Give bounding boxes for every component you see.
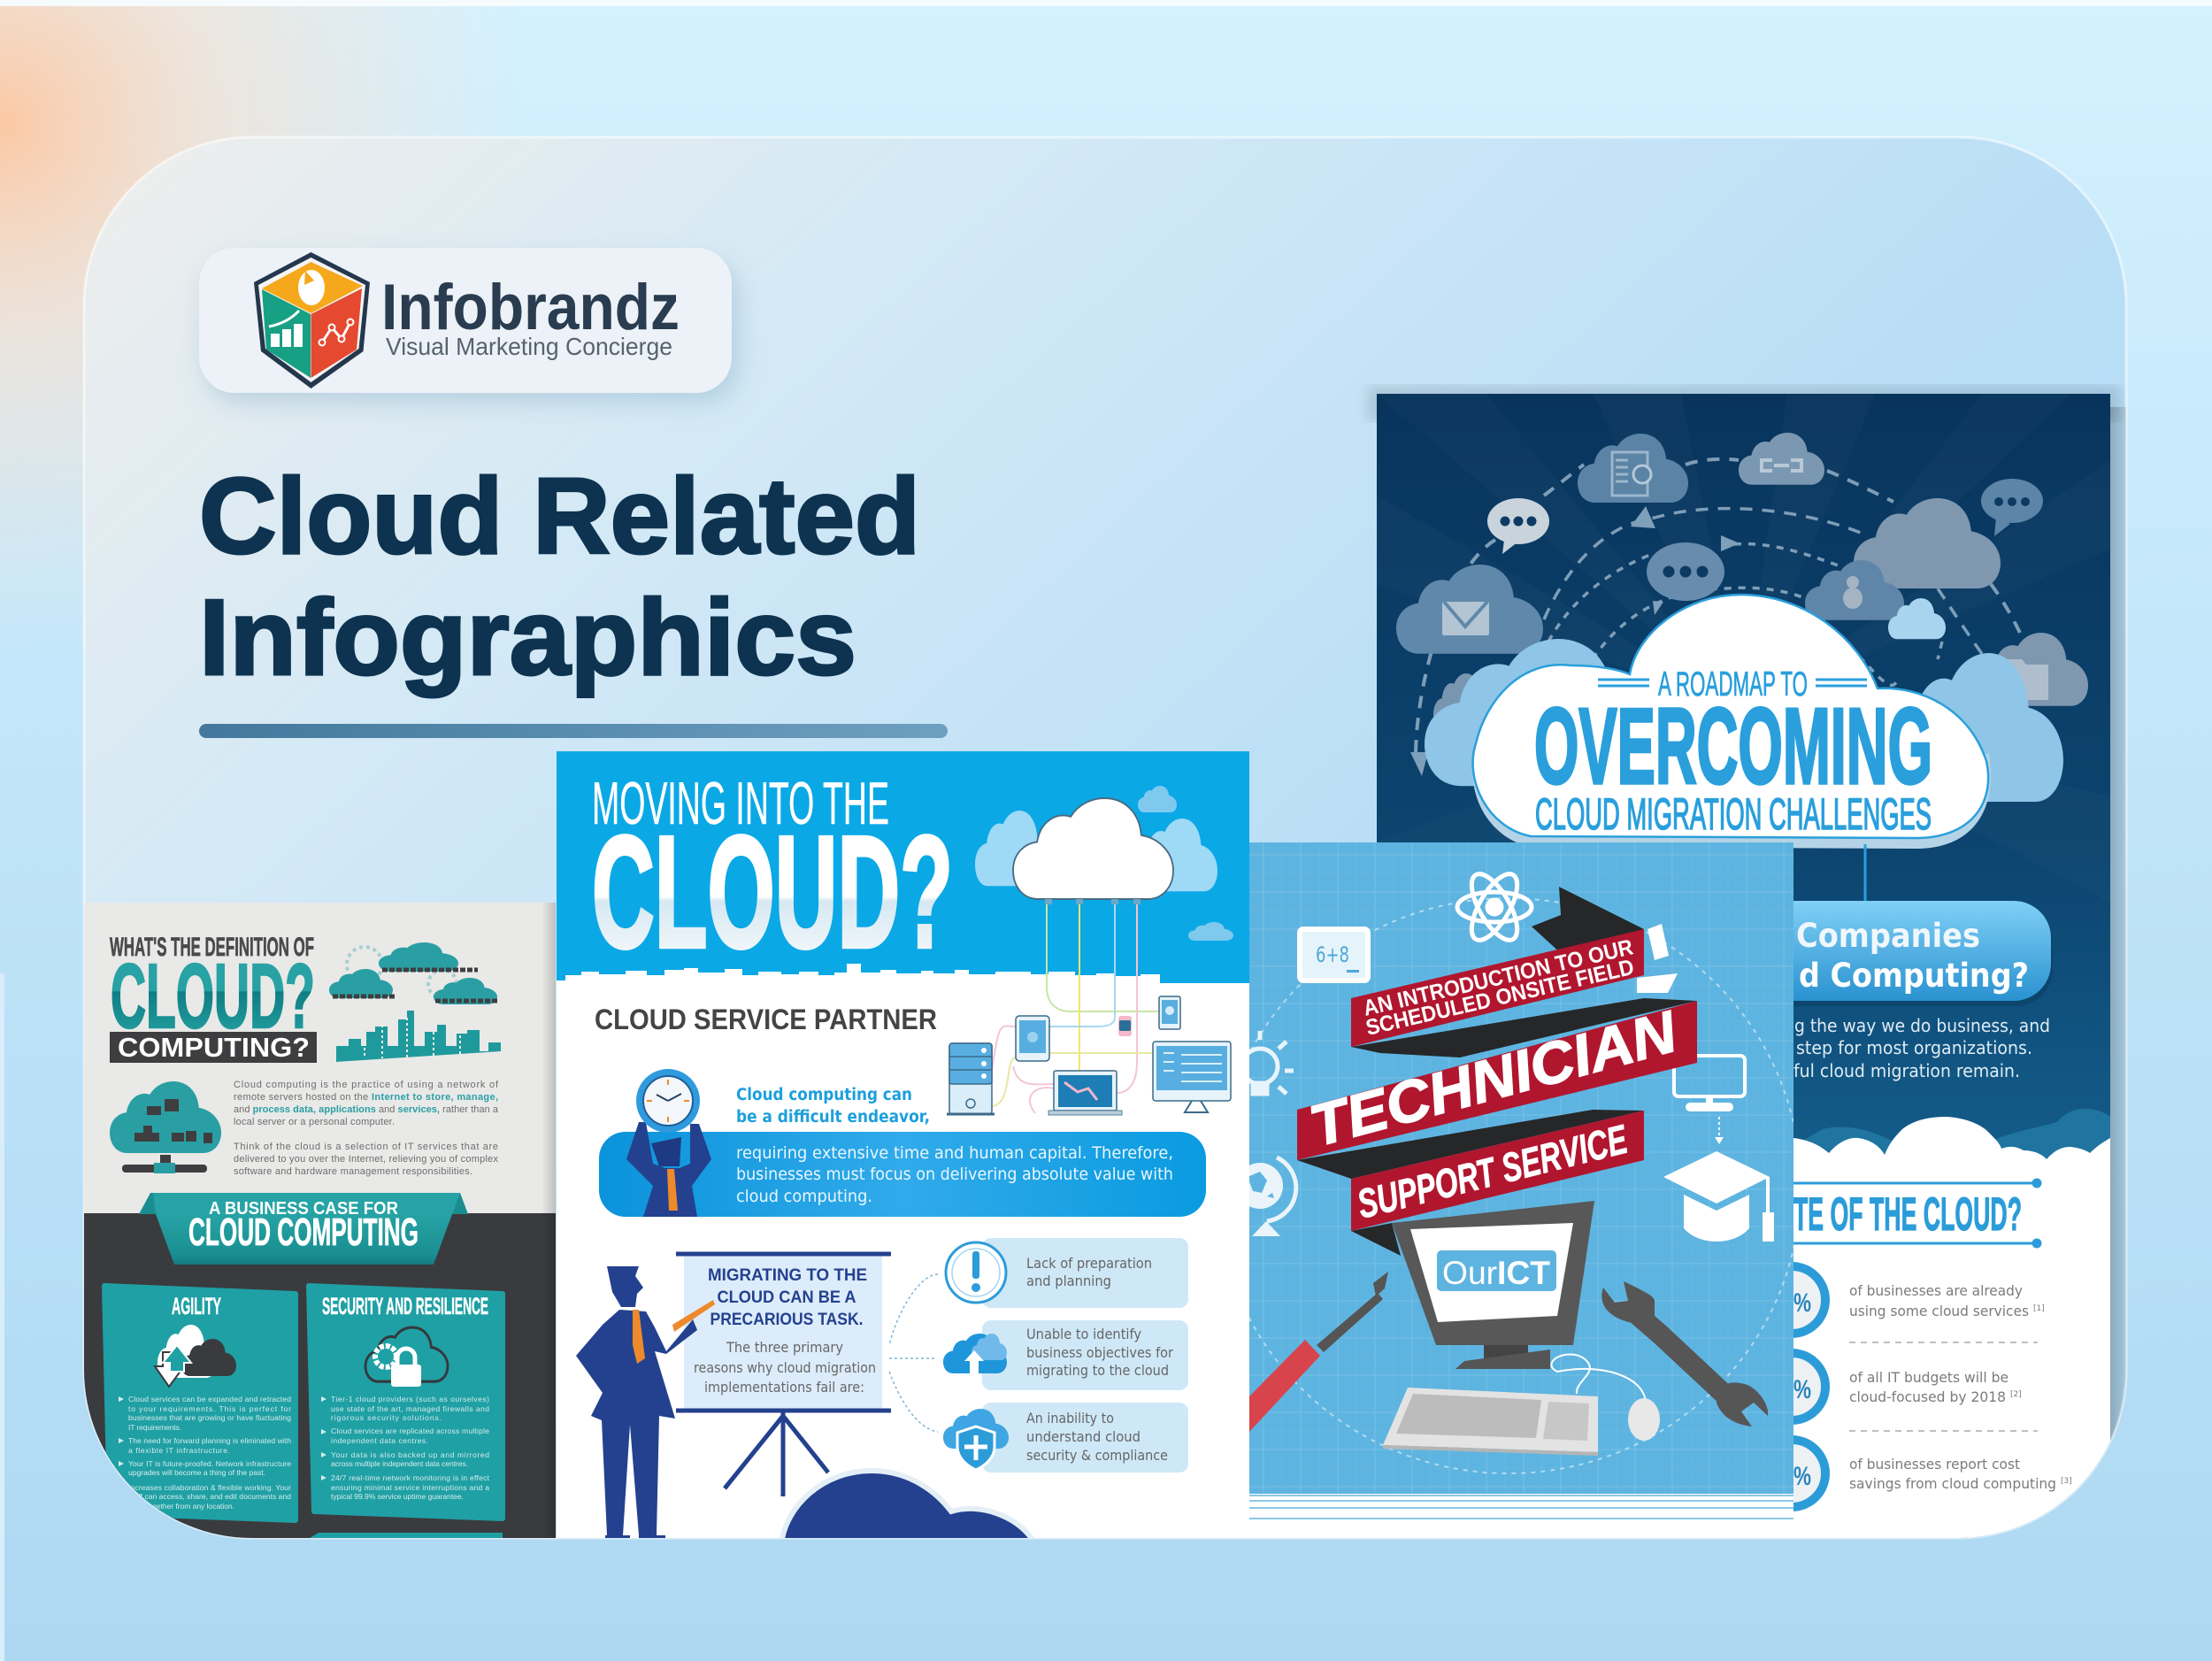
stat: cost savings: % bbox=[1793, 1462, 1811, 1491]
stat: cost savings: of businesses report cost bbox=[1849, 1456, 2020, 1473]
icon: navy cloud at base bbox=[781, 1471, 1035, 1544]
title bbox=[199, 456, 920, 697]
title underline bbox=[199, 724, 948, 738]
icon: desktop monitor bbox=[1153, 1042, 1231, 1112]
reason: inability to understand security: An inability to bbox=[1026, 1410, 1114, 1426]
illustration: mouse and cable bbox=[1551, 1354, 1660, 1441]
icon: phone bbox=[1159, 996, 1180, 1029]
pill heading: companies cloud computing: Companies bbox=[1796, 917, 1980, 955]
definition text: remote servers hosted on the Internet to store, manage, bbox=[234, 1092, 498, 1103]
stat: it budgets: of all IT budgets will be bbox=[1849, 1369, 2008, 1386]
illustration: clouds bbox=[975, 786, 1233, 941]
agility bullets: staff can access, share, and edit documents and bbox=[128, 1492, 291, 1501]
banner: a business case for cloud computing bbox=[139, 1193, 468, 1265]
icon: light bulb bbox=[1242, 1031, 1294, 1094]
definition text: delivered to you over the Internet, relieving you of complex bbox=[234, 1154, 499, 1165]
illustration: presentation board: The three primary bbox=[726, 1339, 843, 1356]
icon: user cloud bbox=[1805, 560, 1904, 620]
icon: graduation cap bbox=[1663, 1151, 1774, 1242]
stat: cost savings: [3] bbox=[2061, 1477, 2072, 1486]
reason: inability to understand security: understand cloud bbox=[1026, 1428, 1141, 1445]
illustration: presentation board: reasons why cloud migration bbox=[694, 1359, 876, 1376]
illustration: cloud city bbox=[329, 942, 501, 1062]
illustration: presentation board: CLOUD CAN BE A bbox=[717, 1288, 856, 1307]
agility bullets: work together from any location. bbox=[127, 1502, 234, 1511]
heading: what's the definition of: WHAT'S THE DEFINITION OF bbox=[110, 933, 314, 962]
stat: it budgets: [2] bbox=[2010, 1390, 2022, 1399]
reason: unable to identify objectives bbox=[943, 1320, 1188, 1390]
reason: lack of preparation: Lack of preparation bbox=[1026, 1255, 1152, 1272]
panel: security and resilience bbox=[309, 1286, 503, 1519]
security bullets: Tier-1 cloud providers (such as ourselves) bbox=[331, 1395, 489, 1403]
intro text: step for most organizations. bbox=[1796, 1037, 2032, 1058]
agility bullets: upgrades will become a thing of the past. bbox=[128, 1468, 265, 1477]
icon: large grey cloud bbox=[1854, 498, 2001, 588]
icon: cloud with server base bbox=[110, 1081, 221, 1173]
poster: overcoming cloud migration challenges bbox=[1368, 386, 2137, 1549]
definition text: Think of the cloud is a selection of IT services that are bbox=[234, 1142, 498, 1152]
agility bullets: Increases collaboration & flexible working. Your bbox=[128, 1483, 291, 1492]
icon: globe bbox=[1237, 1157, 1296, 1236]
stat: cost savings: savings from cloud computing bbox=[1849, 1475, 2056, 1492]
agility bullets: Your IT is future-proofed. Network infrastructure bbox=[128, 1459, 291, 1468]
icon: chat bubble center bbox=[1647, 542, 1724, 601]
cloud divider bbox=[1793, 1109, 2110, 1544]
ribbon: support service bbox=[1351, 1111, 1644, 1231]
ribbon: black folds bbox=[1297, 887, 1697, 1256]
logo badge bbox=[199, 248, 738, 402]
heading: cloud service partner: CLOUD SERVICE PARTNER bbox=[595, 1004, 937, 1035]
icon: chat bubble right bbox=[1981, 479, 2043, 536]
security bullets: rigorous security solutions. bbox=[331, 1413, 442, 1422]
heading: cloud?: CLOUD? bbox=[111, 945, 315, 1047]
panel: agility bbox=[104, 1286, 296, 1520]
heading: computing?: COMPUTING? bbox=[118, 1032, 310, 1063]
text: difficult endeavor: Cloud computing can bbox=[736, 1086, 912, 1104]
skyline edge bbox=[557, 964, 1160, 986]
security bullets: ensuring minimal service interruptions and a bbox=[331, 1483, 489, 1492]
icon: cloud with arrows bbox=[155, 1325, 236, 1387]
ribbon: support service: SUPPORT SERVICE bbox=[1353, 1116, 1632, 1227]
illustration: wrench bbox=[1601, 1281, 1768, 1426]
icon: chat bubble left bbox=[1487, 498, 1549, 554]
ribbon: introduction: AN INTRODUCTION TO OUR bbox=[1361, 934, 1635, 1021]
reason: unable to identify objectives: business objectives for bbox=[1026, 1344, 1173, 1361]
illustration: screwdriver bbox=[1249, 1272, 1388, 1432]
icon: chalk board bbox=[1300, 929, 1368, 980]
heading: a roadmap to: A ROADMAP TO bbox=[1658, 665, 1808, 704]
panel: security and resilience: SECURITY AND RESILIENCE bbox=[322, 1293, 488, 1319]
illustration: keyboard bbox=[1383, 1388, 1598, 1456]
stat: businesses using cloud: of businesses are already bbox=[1849, 1282, 2023, 1299]
stat: businesses using cloud: % bbox=[1793, 1288, 1811, 1318]
stat: cost savings bbox=[1758, 1440, 2072, 1507]
icon: monitor outline bbox=[1674, 1056, 1745, 1144]
agility bullets: a flexible IT infrastructure. bbox=[128, 1446, 230, 1455]
callout: time and capital bar: businesses must focus on delivering absolute value with bbox=[736, 1165, 1173, 1184]
banner: a business case for cloud computing: CLOUD COMPUTING bbox=[188, 1211, 419, 1254]
poster collage bbox=[84, 386, 2137, 1549]
illustration: presentation board bbox=[676, 1254, 891, 1496]
security bullets: Your data is also backed up and mirrored bbox=[331, 1450, 489, 1459]
definition text: Cloud computing is the practice of using a network of bbox=[234, 1080, 499, 1090]
security bullets: Cloud services are replicated across multiple bbox=[331, 1426, 489, 1435]
illustration: computer monitor: OurICT bbox=[1442, 1255, 1550, 1291]
pill heading: companies cloud computing bbox=[1793, 901, 2053, 1006]
reason: unable to identify objectives: migrating to the cloud bbox=[1026, 1362, 1169, 1379]
stat: businesses using cloud: [1] bbox=[2033, 1304, 2045, 1313]
title: Infographics bbox=[199, 577, 856, 697]
agility bullets: Cloud services can be expanded and retracted bbox=[128, 1395, 291, 1403]
definition text: software and hardware management responsibilities. bbox=[234, 1166, 472, 1177]
security bullets bbox=[321, 1395, 490, 1501]
pill heading: companies cloud computing: d Computing? bbox=[1799, 957, 2029, 995]
callout: time and capital bar: cloud computing. bbox=[736, 1187, 872, 1206]
dashed orbit bbox=[1217, 898, 1801, 1473]
icon: small grey cloud bbox=[1433, 673, 1472, 717]
poster: what's the definition of cloud computing bbox=[84, 903, 556, 1549]
illustration: presentation board: PRECARIOUS TASK. bbox=[710, 1311, 864, 1329]
reason: lack of preparation bbox=[946, 1238, 1188, 1308]
illustration: presentation board: implementations fail are: bbox=[704, 1379, 864, 1396]
dashed roadmap arcs bbox=[1416, 459, 2039, 752]
bottom stripes bbox=[1249, 1496, 1793, 1519]
icon: cloud with gear and lock bbox=[365, 1327, 448, 1387]
connector stem bbox=[1863, 844, 1867, 904]
icon: smart watch bbox=[1118, 1016, 1132, 1036]
intro text: ful cloud migration remain. bbox=[1793, 1060, 2020, 1081]
icon: atom bbox=[1457, 867, 1532, 947]
icon: microscope bbox=[1637, 924, 1678, 993]
callout: time and capital bar: requiring extensive time and human capital. Therefore, bbox=[736, 1143, 1173, 1163]
logo wordmark: Infobrandz bbox=[381, 272, 680, 343]
icon: link cloud bbox=[1739, 433, 1824, 485]
title: Cloud Related bbox=[199, 456, 920, 576]
sun rays bbox=[1377, 394, 2110, 956]
security bullets: typical 99.9% service uptime guarantee. bbox=[331, 1492, 464, 1501]
poster: technician support service bbox=[1217, 842, 1801, 1542]
icon: right blue cloud bbox=[1922, 653, 2063, 802]
agility bullets bbox=[119, 1395, 291, 1511]
icon: small light cloud bbox=[1888, 598, 1946, 639]
network wires bbox=[991, 904, 1159, 1113]
agility bullets: businesses that are growing or have fluctuating bbox=[128, 1413, 291, 1422]
icon: mail cloud bbox=[1396, 565, 1543, 654]
illustration: presentation board: MIGRATING TO THE bbox=[708, 1266, 867, 1285]
definition text: and process data, applications and services, rather than a bbox=[234, 1104, 499, 1115]
icon: chalk board: 6+8 bbox=[1316, 942, 1349, 967]
security bullets: across multiple independent data centres. bbox=[331, 1459, 468, 1468]
poster: moving into the cloud bbox=[557, 751, 1249, 1544]
agility bullets: IT requirements. bbox=[128, 1423, 181, 1432]
agility bullets: The need for forward planning is eliminated with bbox=[128, 1436, 291, 1445]
connector dotted lines bbox=[889, 1274, 938, 1432]
icon: tablet bbox=[1016, 1016, 1049, 1061]
reason: lack of preparation: and planning bbox=[1026, 1273, 1111, 1289]
glass card panel bbox=[84, 137, 2126, 1538]
intro text: g the way we do business, and bbox=[1794, 1015, 2050, 1036]
logo tagline: Visual Marketing Concierge bbox=[386, 333, 672, 360]
heading: moving into the: MOVING INTO THE bbox=[592, 770, 889, 837]
security bullets: 24/7 real-time network monitoring is in effect bbox=[331, 1473, 490, 1482]
heading: state of the cloud bbox=[1793, 1179, 2042, 1248]
icon: hexagonal cube logo bbox=[254, 252, 370, 388]
illustration: presenter bbox=[576, 1266, 715, 1539]
reason: inability to understand security: security & compliance bbox=[1026, 1447, 1168, 1464]
heading: cloud?: CLOUD? bbox=[592, 804, 953, 981]
stat: it budgets: cloud-focused by 2018 bbox=[1849, 1388, 2006, 1405]
icon: folder cloud bbox=[1998, 633, 2088, 706]
icon: laptop bbox=[1048, 1071, 1122, 1115]
reason: inability to understand security bbox=[943, 1403, 1188, 1473]
text: difficult endeavor bbox=[736, 1086, 930, 1127]
icon: left blue cloud bbox=[1425, 639, 1605, 786]
security bullets: use state of the art, managed firewalls and bbox=[331, 1404, 489, 1413]
icon: server bbox=[947, 1043, 995, 1114]
stat: it budgets bbox=[1758, 1353, 2038, 1431]
security bullets: independent data centres. bbox=[331, 1436, 428, 1445]
banner: a business case for cloud computing: A BUSINESS CASE FOR bbox=[209, 1199, 399, 1219]
stat: businesses using cloud bbox=[1758, 1266, 2045, 1342]
stat: businesses using cloud: using some cloud services bbox=[1849, 1303, 2029, 1319]
definition text: local server or a personal computer. bbox=[234, 1117, 395, 1127]
arc arrowheads bbox=[1410, 506, 1740, 776]
ribbon: technician: TECHNICIAN bbox=[1302, 998, 1684, 1159]
definition text bbox=[234, 1080, 499, 1177]
intro text bbox=[1793, 1015, 2050, 1081]
white heading cloud bbox=[1473, 595, 1991, 849]
callout: time and capital bar bbox=[599, 1132, 1206, 1217]
stat: it budgets: % bbox=[1793, 1375, 1811, 1404]
agility bullets: to your requirements. This is perfect for bbox=[128, 1404, 291, 1413]
icon: document cloud bbox=[1578, 434, 1688, 503]
panel: agility: AGILITY bbox=[172, 1293, 221, 1319]
ribbon: introduction: SCHEDULED ONSITE FIELD bbox=[1363, 955, 1636, 1041]
illustration: man holding clock bbox=[626, 1069, 711, 1217]
illustration: computer monitor bbox=[1392, 1201, 1594, 1369]
heading: a roadmap to bbox=[1598, 671, 1867, 696]
reason: unable to identify objectives: Unable to identify bbox=[1026, 1326, 1141, 1342]
text: difficult endeavor: be a difficult endeavor, bbox=[736, 1108, 930, 1127]
